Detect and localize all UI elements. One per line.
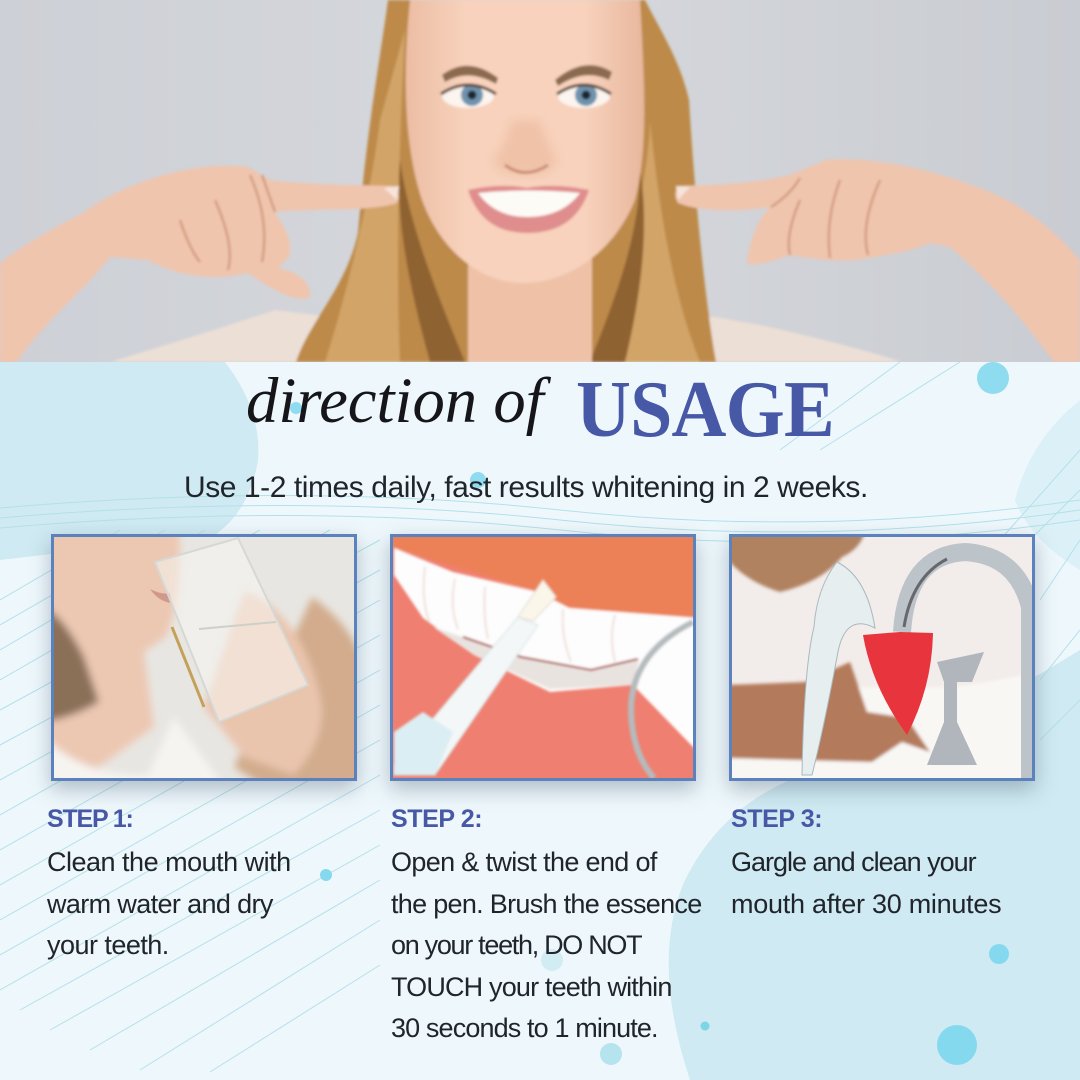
title bold part: USAGE [576,365,834,454]
subtitle: Use 1-2 times daily, fast results whitening in 2 weeks. [184,471,868,504]
step 1 text: warm water and dry [47,888,273,918]
photo 2: pen applied to teeth [390,534,696,781]
step 3 text [731,847,1001,918]
step 2 text: Open & twist the end of [391,847,657,877]
step 2 [391,805,702,1043]
step 2 text [391,847,702,1043]
step 3 label: STEP 3: [731,805,822,833]
photo 3: gargling and rinsing at the tap [729,534,1035,781]
step 1 text: Clean the mouth with [47,847,291,877]
step 1 text: your teeth. [47,930,169,960]
step 2 text: on your teeth, DO NOT [391,930,641,960]
step 1 [47,805,291,960]
step 2 text: the pen. Brush the essence [391,888,702,918]
title script part: direction of [246,364,544,436]
step 2 label: STEP 2: [391,805,482,833]
step 3 text: mouth after 30 minutes [731,888,1001,918]
step 1 text [47,847,291,960]
step 3 [731,805,1001,918]
hero photo: woman pointing at her smile [0,0,1080,362]
step 2 text: TOUCH your teeth within [391,972,672,1002]
photo 1: woman drinking water [51,534,357,781]
step 2 text: 30 seconds to 1 minute. [391,1013,658,1043]
title: direction of USAGE [246,364,834,454]
step 1 label: STEP 1: [47,805,133,833]
step 3 text: Gargle and clean your [731,847,976,877]
